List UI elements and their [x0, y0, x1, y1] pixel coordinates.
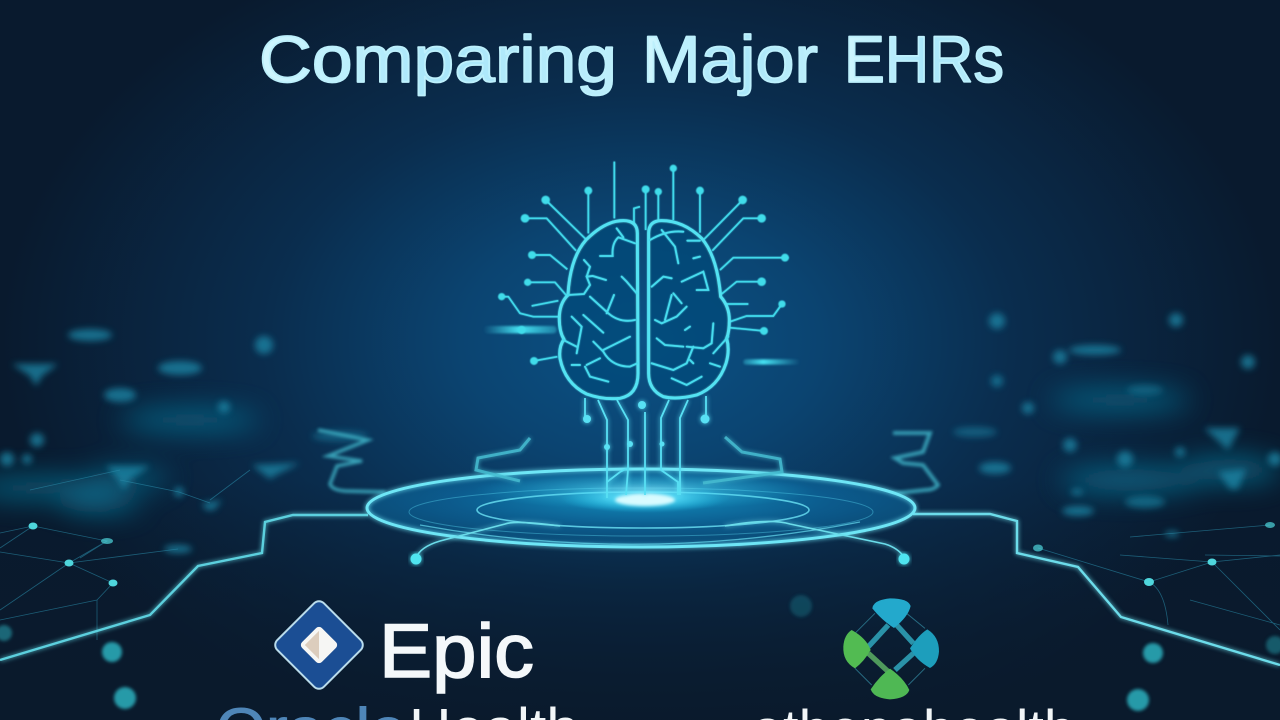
- disc connectors with end nodes: [416, 437, 904, 558]
- title: Major: [642, 22, 818, 96]
- logo: Epic diamond: [272, 598, 366, 692]
- light flare: left: [483, 326, 557, 333]
- right network field: [790, 313, 1280, 711]
- title: Comparing: [259, 22, 617, 96]
- logo: Epic wordmark: Epic: [379, 609, 534, 694]
- logo: athenahealth symbol: [843, 598, 939, 699]
- logo: Oracle Health: [216, 697, 579, 720]
- brain hemisphere: left: [559, 221, 638, 399]
- light flare: right: [743, 359, 800, 365]
- title: EHRs: [844, 22, 1004, 96]
- brain stem circuits: [583, 396, 710, 498]
- brain hemisphere: right: [649, 221, 729, 398]
- title: [259, 22, 1004, 96]
- brain folds: [563, 228, 728, 385]
- circuit line: right: [913, 514, 1280, 665]
- squiggle: outer left: [318, 430, 385, 492]
- brain wiring: [502, 162, 788, 361]
- brain: [483, 162, 800, 399]
- platform disc: [367, 469, 915, 547]
- circuit line: left: [0, 515, 368, 660]
- disc end node: left: [410, 554, 422, 564]
- logo: Epic gem: [299, 625, 339, 665]
- disc end node: right: [898, 554, 910, 564]
- squiggle: outer right: [890, 433, 938, 494]
- left network field: [0, 329, 368, 709]
